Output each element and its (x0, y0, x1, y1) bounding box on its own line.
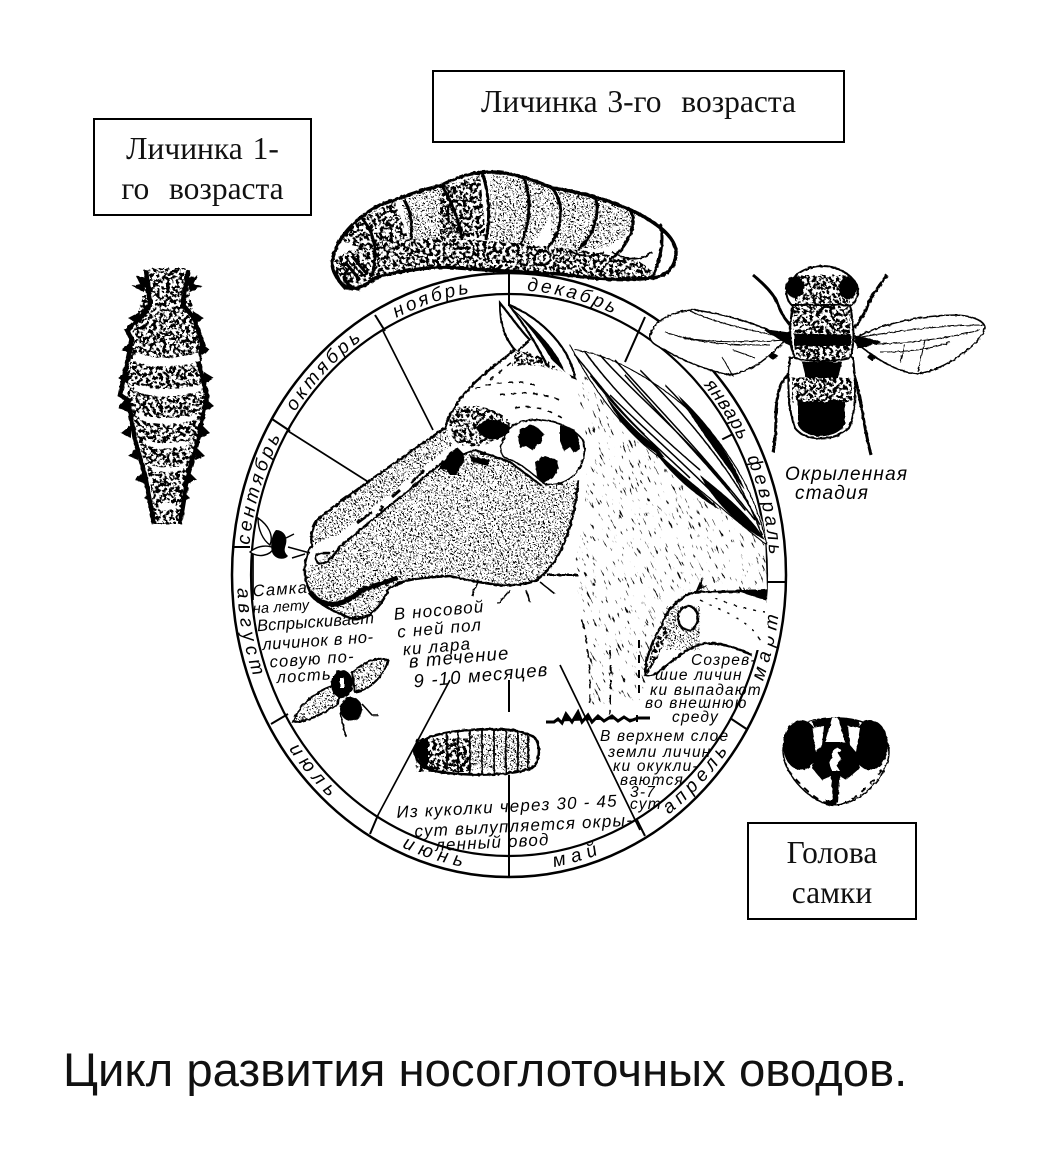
note: female sprays larvae: личинок в но- (261, 628, 374, 654)
note: female sprays larvae: лость (275, 665, 332, 687)
note: from pupa: Из куколки через 30 - 45 (396, 791, 618, 822)
compound eyes (783, 720, 819, 770)
pupa (414, 729, 539, 775)
head of female (783, 718, 889, 805)
note: from pupa: ленный овод (434, 830, 550, 855)
note: in nasal cavity: 9 -10 месяцев (413, 659, 549, 691)
note: mature larvae: ки выпадают (650, 682, 762, 699)
month labels: октябрь (288, 336, 360, 410)
fly abdomen (788, 352, 855, 438)
note: in nasal cavity: В носовой (393, 597, 485, 624)
note: top soil layer: сут (630, 796, 662, 813)
month labels (237, 277, 779, 867)
month labels: ноябрь (394, 284, 468, 318)
larva white bands (134, 352, 201, 510)
label: first instar: Личинка 1- (126, 131, 279, 166)
label: head of female: Голова (787, 835, 877, 870)
month labels: июнь (403, 838, 462, 866)
month labels: апрель (665, 750, 726, 814)
main diagram (118, 170, 986, 878)
note: in nasal cavity: с ней пол (396, 615, 483, 642)
mane (570, 345, 767, 545)
month labels: январь (703, 381, 746, 439)
neck fill (572, 372, 767, 705)
note: in nasal cavity: ки лара (402, 634, 472, 659)
label: first instar: го возраста (121, 171, 284, 206)
horse head (305, 303, 767, 715)
eye mask (450, 406, 510, 446)
month labels: август (237, 588, 262, 674)
white patch and blotches (501, 420, 584, 484)
note: mature larvae: во внешнюю (645, 695, 748, 712)
head fill (305, 350, 585, 619)
note: top soil layer: В верхнем слое (600, 728, 729, 745)
ground line (546, 712, 650, 723)
label: third instar: Личинка 3-го возраста (481, 84, 796, 119)
neck hair texture (576, 376, 766, 705)
right wing (853, 315, 985, 374)
note: female sprays larvae: на лету (252, 598, 310, 618)
caption: Цикл развития носоглоточных оводов. (63, 1044, 907, 1097)
label: first instar (93, 118, 312, 216)
note: mature larvae: Созрев- (691, 652, 757, 669)
note: female sprays larvae: Самка (252, 579, 309, 601)
jaw whiskers (472, 582, 555, 604)
left wing (650, 310, 787, 375)
winged fly (650, 266, 985, 455)
cheek stipple (306, 450, 578, 619)
face edge lines (338, 450, 542, 548)
month labels: июль (290, 744, 332, 796)
nose bridge stipple (312, 428, 452, 545)
month labels: декабрь (528, 277, 614, 312)
small horse head (645, 578, 768, 676)
falling larva marks (637, 640, 639, 722)
label: third instar (432, 70, 845, 143)
note: mature larvae: шие личин (655, 667, 743, 684)
note: top soil layer: 3-7 (630, 784, 656, 801)
first instar larva (118, 268, 214, 524)
ears (500, 303, 575, 378)
larva body texture (127, 268, 205, 524)
small flying fly (293, 659, 388, 737)
eye (476, 420, 512, 439)
annotations (251, 464, 908, 857)
month ring (230, 272, 788, 878)
month labels: май (554, 842, 596, 867)
label: head of female (747, 822, 917, 920)
month labels: март (754, 615, 778, 682)
note: in nasal cavity: в течение (408, 642, 510, 672)
third instar segments (362, 172, 662, 277)
head outline (305, 350, 578, 619)
fly thorax (790, 305, 853, 361)
month labels: февраль (747, 456, 779, 554)
small fly at nostril (250, 518, 310, 559)
note: top soil layer: земли личин (607, 744, 712, 761)
third instar lower band (334, 238, 660, 288)
note: female sprays larvae: совую по- (269, 648, 355, 672)
lower neck edges (582, 620, 611, 715)
note: top soil layer: ваются (620, 772, 684, 789)
nasal dashes (357, 470, 424, 523)
note: female sprays larvae: Вспрыскивает (256, 609, 375, 635)
note: winged stage: Окрыленная (785, 464, 908, 485)
fly legs (753, 275, 887, 455)
note: mature larvae: среду (672, 709, 719, 726)
larva side edges and spikes (120, 270, 207, 524)
forehead hair (465, 352, 565, 420)
fly head (786, 266, 858, 308)
note: top soil layer: ки окукли- (613, 758, 699, 775)
sector lines (253, 331, 640, 830)
month labels: сентябрь (240, 436, 279, 544)
third instar larva (332, 172, 676, 290)
note: winged stage: стадия (795, 483, 869, 504)
frons markings (812, 718, 860, 802)
third instar dorsal shading (340, 175, 486, 248)
note: from pupa: сут вылупляется окры- (414, 811, 634, 841)
label: head of female: самки (792, 875, 872, 910)
